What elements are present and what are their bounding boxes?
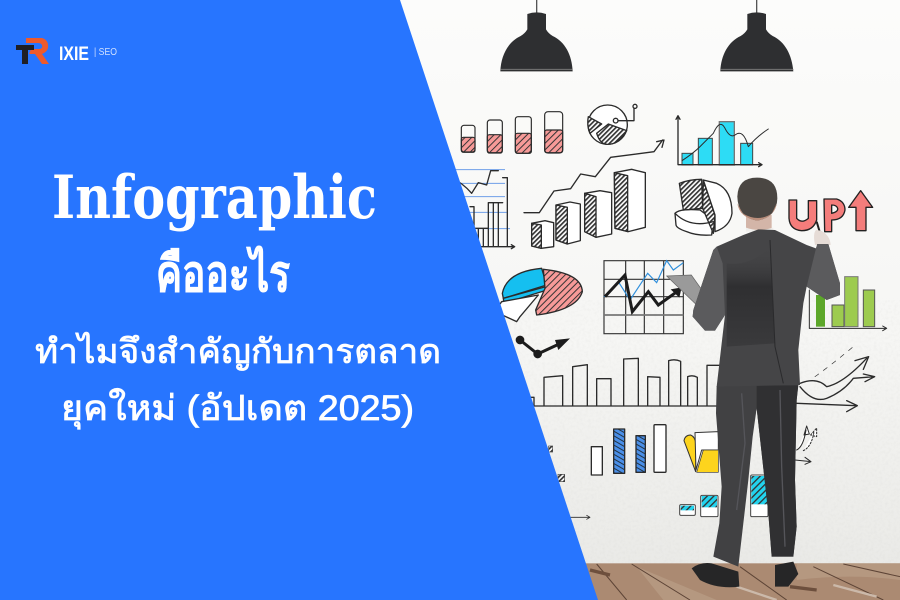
logo: Trixie SEO: | SEO [94, 47, 117, 58]
chart: small cyan hatched jars [680, 475, 768, 517]
floor: wooden planks [400, 563, 900, 600]
jacket sleeves [693, 247, 725, 331]
chart: rising 3D bars with arrow line [524, 140, 664, 248]
hand and marker [817, 222, 821, 235]
icon: left pendant lamp [500, 0, 573, 71]
jacket shadow [727, 247, 775, 347]
subtitle line 2: ยุคใหม่ (อัปเดต 2025) [61, 388, 414, 429]
logo: Trixie SEO: IXIE [59, 44, 89, 65]
trousers [713, 384, 798, 567]
chart: curved arrows [797, 347, 875, 412]
photo: wall with hand-drawn charts and businessman [390, 0, 900, 600]
head [737, 178, 777, 221]
logo: Trixie SEO [16, 38, 117, 65]
neck and collar [746, 215, 772, 230]
jacket [693, 229, 840, 387]
subtitle line 1: ทำไมจึงสำคัญกับการตลาด [35, 332, 441, 371]
icon: yellow folder [684, 432, 718, 472]
heading: what is it: คืออะไร [156, 245, 290, 302]
left shoe [692, 563, 739, 587]
illustration: businessman seen from behind [667, 178, 840, 587]
chart: green bars [809, 277, 887, 331]
title: Infographic: Infographic [52, 163, 377, 233]
chart: blue hatched bars [591, 425, 666, 475]
chart: cyan and pink 3D pie [495, 268, 582, 322]
chart: cyan bars with curve [676, 116, 768, 167]
icon: small dotted arrows [795, 426, 817, 464]
icon: right pendant lamp [720, 0, 793, 71]
tablet [667, 275, 707, 307]
chart: pink filled cylinders [461, 112, 563, 153]
icon: hatched fragments beside panel [549, 446, 565, 482]
chart: hatched pie with pointer [588, 104, 637, 144]
panel: blue diagonal background [0, 0, 598, 600]
chart: long outline bar chart [530, 358, 720, 406]
right shoe [775, 562, 798, 587]
chart: grid with blue and black lines [604, 261, 683, 334]
chart: segmented 3D pie [675, 179, 732, 235]
chart: left bar chart behind panel [450, 170, 515, 249]
chart: small arrow line near panel [570, 515, 590, 519]
icon: black zigzag arrow [516, 336, 570, 358]
icon: UP arrow lettering [789, 191, 873, 232]
